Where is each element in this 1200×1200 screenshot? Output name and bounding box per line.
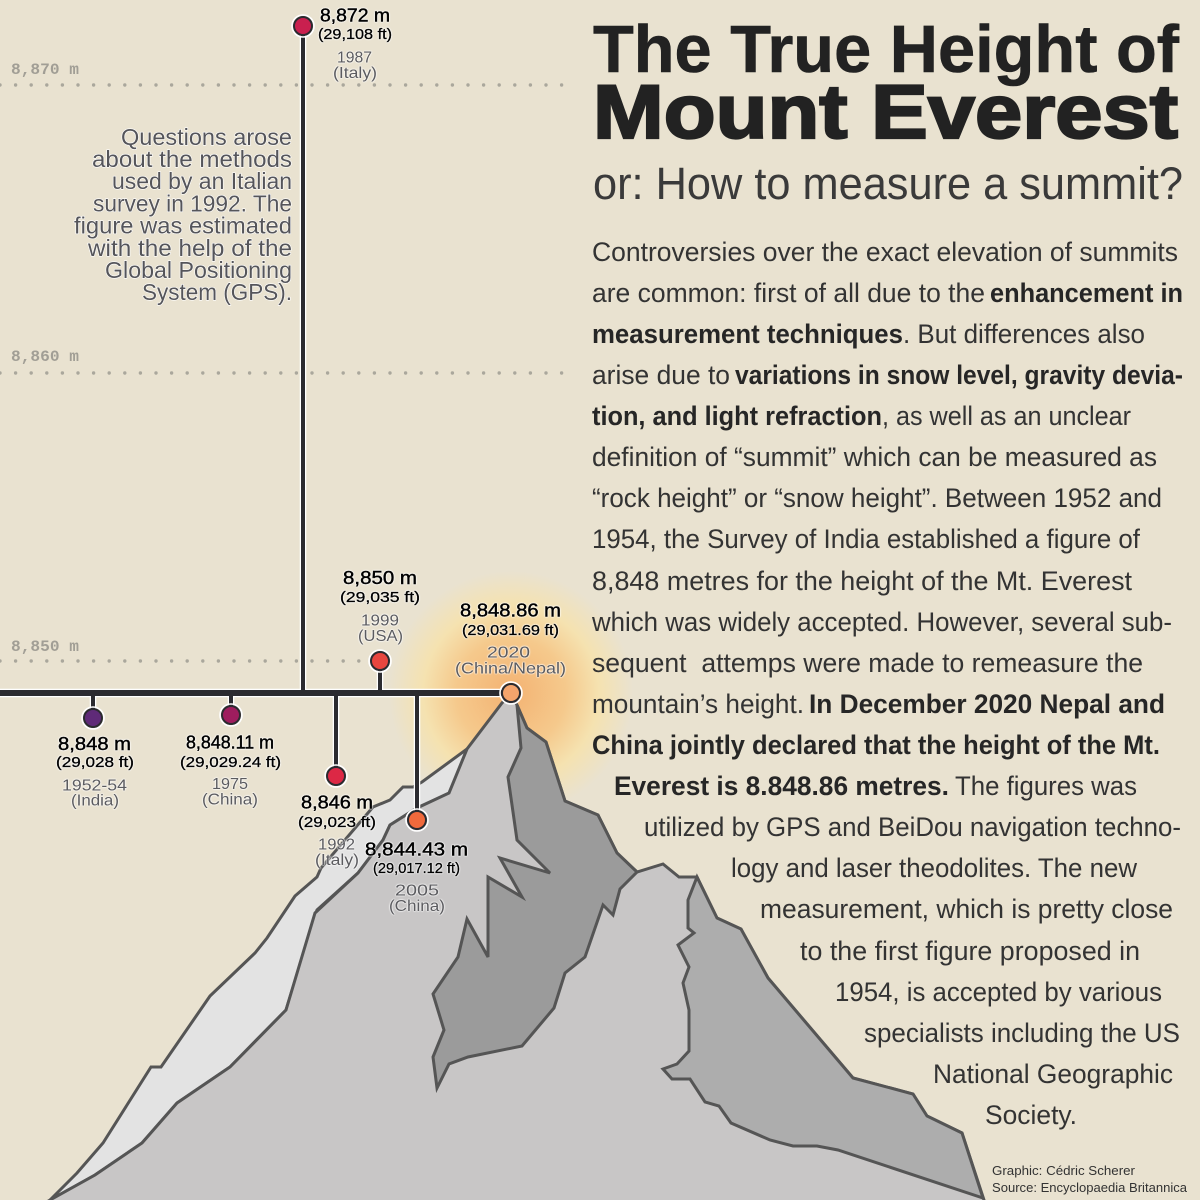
body text: Society.: [985, 1100, 1077, 1130]
body text: definition of “summit” which can be measured as: [592, 442, 1157, 472]
body text: The figures was: [955, 771, 1137, 801]
label: 1975 China: (China): [202, 792, 258, 808]
body text: which was widely accepted. However, several sub-: [591, 607, 1172, 637]
label: 1975 China: 1975: [212, 776, 248, 793]
annotation: Italian survey: used by an Italian: [112, 168, 292, 194]
marker: 1952-54: [84, 709, 102, 727]
credits: [992, 1163, 1188, 1195]
annotation: Italian survey: about the methods: [92, 146, 292, 172]
title: Mount Everest: [593, 70, 1178, 155]
label: 1999 USA: (29,035 ft): [340, 589, 420, 606]
label: 1975 China: (29,029.24 ft): [180, 754, 281, 771]
label: 1987 Italy: (29,108 ft): [318, 26, 392, 43]
label: 2005 China: [365, 838, 468, 915]
label: 2020 China/Nepal: 8,848.86 m: [460, 600, 561, 620]
label: 2005 China: 2005: [395, 882, 439, 900]
label: 1952-54 India: 8,848 m: [58, 733, 131, 754]
body text: 8,848 metres for the height of the Mt. Everest: [592, 566, 1133, 596]
body text: mountain’s height.: [592, 689, 804, 719]
label: 1999 USA: [340, 567, 420, 645]
label: 1992 Italy: (29,023 ft): [298, 814, 376, 831]
body text: measurement techniques: [592, 319, 903, 349]
annotation: Italian survey: survey in 1992. The: [93, 190, 292, 216]
body text: enhancement in: [990, 278, 1183, 308]
annotation: Italian survey: Questions arose: [121, 124, 292, 150]
label: 1992 Italy: 1992: [318, 836, 355, 854]
body text: sequent attemps were made to remeasure the: [592, 648, 1143, 678]
main massif: [40, 693, 984, 1200]
annotation: Italian survey: figure was estimated: [74, 212, 292, 238]
title: The True Height of: [593, 12, 1180, 87]
body text: arise due to: [592, 360, 730, 390]
annotation: Italian survey: System (GPS).: [142, 279, 292, 305]
annotation: Italian survey: Global Positioning: [105, 257, 292, 283]
label: 2005 China: (29,017.12 ft): [373, 860, 460, 877]
label: 1992 Italy: (Italy): [315, 852, 359, 869]
credits: Source: Encyclopaedia Britannica: [992, 1180, 1188, 1195]
mountain illustration: [40, 693, 984, 1200]
body text: China jointly declared that the height of the Mt.: [592, 730, 1160, 760]
label: 1999 USA: 1999: [361, 612, 399, 630]
timeline stems and axis: [0, 26, 511, 820]
axis label: 8,860 m: 8,860 m: [11, 348, 79, 366]
body text: [591, 237, 1183, 1130]
subtitle: or: How to measure a summit?: [593, 158, 1183, 209]
marker: 1975: [222, 706, 240, 724]
label: 1975 China: 8,848.11 m: [186, 732, 274, 752]
body text: tion, and light refraction: [592, 401, 882, 431]
body text: are common: first of all due to the: [592, 278, 985, 308]
body text: Everest is 8.848.86 metres.: [614, 771, 949, 801]
label: 1992 Italy: [298, 792, 376, 869]
marker: 1987: [294, 17, 312, 35]
marker: 2005: [408, 811, 426, 829]
label: 1952-54 India: (India): [71, 792, 119, 810]
body text: logy and laser theodolites. The new: [731, 853, 1138, 883]
body text: 1954, is accepted by various: [835, 977, 1162, 1007]
label: 1987 Italy: 1987: [337, 50, 372, 66]
label: 2005 China: (China): [389, 898, 445, 915]
label: 1952-54 India: (29,028 ft): [56, 754, 134, 771]
annotation: Italian survey: with the help of the: [87, 235, 292, 261]
label: 1987 Italy: (Italy): [333, 65, 377, 82]
marker: 1999: [371, 652, 389, 670]
body text: . But differences also: [903, 319, 1145, 349]
shaded central face: [433, 705, 637, 1088]
body text: , as well as an unclear: [882, 401, 1131, 431]
body text: National Geographic: [933, 1059, 1173, 1089]
body text: 1954, the Survey of India established a figure of: [592, 524, 1141, 554]
label: 1999 USA: (USA): [358, 628, 403, 645]
label: 2005 China: 8,844.43 m: [365, 838, 468, 860]
credits: Graphic: Cédric Scherer: [992, 1163, 1136, 1178]
label: 1987 Italy: 8,872 m: [320, 4, 390, 26]
body text: utilized by GPS and BeiDou navigation techno-: [644, 812, 1181, 842]
title: [593, 12, 1180, 155]
label: 2020 China/Nepal: (China/Nepal): [455, 660, 566, 678]
snow slope: [50, 749, 467, 1200]
shaded right face: [663, 877, 983, 1198]
body text: to the first figure proposed in: [800, 936, 1140, 966]
label: 2020 China/Nepal: [455, 600, 566, 678]
body text: specialists including the US: [864, 1018, 1180, 1048]
marker: 1992: [327, 767, 345, 785]
label: 2020 China/Nepal: (29,031.69 ft): [462, 622, 559, 639]
annotation: Italian survey: [74, 124, 292, 305]
label: 1987 Italy: [318, 4, 392, 82]
label: 1975 China: [180, 732, 281, 808]
axis label: 8,850 m: 8,850 m: [11, 638, 79, 656]
axis label: 8,870 m: 8,870 m: [11, 61, 79, 79]
label: 1999 USA: 8,850 m: [343, 567, 417, 588]
label: 1952-54 India: 1952-54: [62, 778, 127, 794]
marker: 2020: [502, 684, 520, 702]
summit glow: [389, 571, 633, 815]
body text: measurement, which is pretty close: [760, 894, 1173, 924]
label: 1952-54 India: [56, 733, 134, 810]
label: 2020 China/Nepal: 2020: [487, 644, 530, 662]
body text: “rock height” or “snow height”. Between 1952 and: [592, 483, 1162, 513]
body text: Controversies over the exact elevation of summits: [592, 237, 1178, 267]
body text: In December 2020 Nepal and: [809, 689, 1165, 719]
label: 1992 Italy: 8,846 m: [301, 792, 373, 812]
